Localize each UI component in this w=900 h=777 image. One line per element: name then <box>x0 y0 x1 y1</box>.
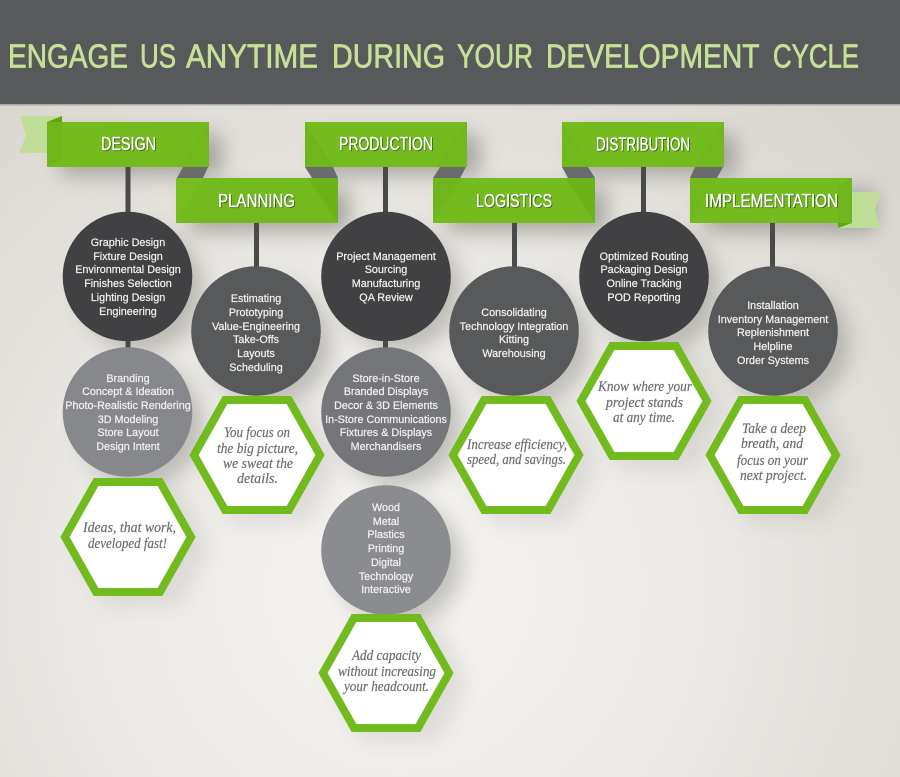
circle: materials: Interactive <box>361 584 411 596</box>
title: CYCLE <box>773 38 859 74</box>
circle: materials: Metal <box>373 516 399 528</box>
circle: planning services: Value-Engineering <box>212 321 300 333</box>
circle: production management <box>321 212 451 341</box>
circle: production management: QA Review <box>359 292 413 304</box>
banner: logistics: LOGISTICS <box>476 191 552 211</box>
banner: design <box>19 116 209 167</box>
circle: logistics services: Kitting <box>499 334 529 346</box>
title: DURING <box>332 38 445 74</box>
circle: branding services: Branding <box>106 373 150 385</box>
banner: design: DESIGN <box>101 134 156 154</box>
circle: materials: Plastics <box>367 529 405 541</box>
banner: production: PRODUCTION <box>339 134 433 154</box>
circle: production management: Project Management <box>336 251 436 263</box>
circle: graphic design services: Finishes Selection <box>84 278 172 290</box>
banner: distribution <box>562 122 724 167</box>
banner shadows <box>62 135 875 232</box>
header bar <box>0 0 900 106</box>
title: ENGAGE <box>8 38 128 74</box>
circle: logistics services: Consolidating <box>481 307 547 319</box>
circle: materials: Technology <box>359 571 414 583</box>
banner: logistics <box>433 178 595 223</box>
circle and hexagon shadows <box>75 228 853 740</box>
circle: store elements: Store-in-Store <box>352 373 420 385</box>
circle: graphic design services: Engineering <box>99 306 157 318</box>
circle: logistics services: Warehousing <box>482 348 546 360</box>
banner: implementation <box>690 178 881 228</box>
circle: graphic design services: Lighting Design <box>91 292 165 304</box>
circle: implementation services: Installation <box>747 300 799 312</box>
circle: store elements: In-Store Communications <box>325 414 448 426</box>
hexagon: implementation callout <box>710 400 836 510</box>
circle: materials: Wood <box>372 502 400 514</box>
circle: store elements: Fixtures & Displays <box>340 427 433 439</box>
circle: store elements: Branded Displays <box>344 386 429 398</box>
circle: implementation services: Inventory Management <box>718 314 828 326</box>
hexagon: design callout <box>65 482 191 592</box>
title: YOUR <box>457 38 533 74</box>
hexagon: distribution callout: project stands <box>605 395 683 411</box>
circle: distribution services: Optimized Routing <box>600 251 688 263</box>
connector stems <box>126 166 775 349</box>
circle: implementation services: Helpline <box>753 341 793 353</box>
hexagon: planning callout <box>194 400 320 510</box>
hexagon: planning callout: the big picture, <box>217 441 298 457</box>
hexagon: production callout: your headcount. <box>342 679 429 695</box>
circle: materials <box>321 485 451 615</box>
hexagon: logistics callout: Increase efficiency, <box>466 437 567 453</box>
circle: planning services: Layouts <box>237 348 276 360</box>
circle: logistics services: Technology Integration <box>460 321 568 333</box>
circle: branding services: Concept & Ideation <box>82 386 174 398</box>
hexagon: planning callout: we sweat the <box>223 456 293 472</box>
circle: materials: Digital <box>371 557 401 569</box>
circle: graphic design services <box>63 212 192 341</box>
hexagon: design callout: Ideas, that work, <box>82 520 176 536</box>
hexagon: implementation callout: next project. <box>740 468 807 484</box>
circle: graphic design services: Graphic Design <box>91 237 165 249</box>
title: ANYTIME <box>186 38 318 74</box>
hexagon: design callout: developed fast! <box>88 536 167 552</box>
circle: store elements: Merchandisers <box>351 441 422 453</box>
circle: branding services <box>63 347 192 477</box>
banner: planning: PLANNING <box>218 191 295 211</box>
circle: implementation services: Order Systems <box>737 355 810 367</box>
circle: materials: Printing <box>368 543 404 555</box>
circle: planning services: Estimating <box>231 293 281 305</box>
hexagon: logistics callout <box>453 400 579 510</box>
banner: distribution: DISTRIBUTION <box>596 134 690 154</box>
light stem between production circles <box>383 475 388 487</box>
circle: graphic design services: Environmental Design <box>75 264 181 276</box>
banner fold connectors <box>177 167 723 178</box>
title: US <box>140 38 176 74</box>
hexagon: logistics callout: speed, and savings. <box>467 452 566 468</box>
hexagon: distribution callout: Know where your <box>597 379 692 395</box>
circle: production management: Sourcing <box>365 264 407 276</box>
circle: implementation services <box>708 266 838 396</box>
hexagon: implementation callout: breath, and <box>741 436 803 452</box>
hexagon: production callout: without increasing <box>338 664 436 680</box>
banner: implementation: IMPLEMENTATION <box>705 191 838 211</box>
circle: distribution services: POD Reporting <box>607 292 681 304</box>
circle: graphic design services: Fixture Design <box>93 251 163 263</box>
circle: distribution services: Packaging Design <box>600 264 688 276</box>
circle: branding services: Photo-Realistic Rendering <box>65 400 191 412</box>
circle: planning services: Take-Offs <box>233 334 280 346</box>
hexagon: implementation callout: focus on your <box>737 453 808 469</box>
hexagon: production callout <box>323 618 449 728</box>
circle: logistics services <box>449 266 579 396</box>
circle: implementation services: Replenishment <box>737 327 809 339</box>
circle: branding services: 3D Modeling <box>98 414 158 426</box>
hexagon: distribution callout <box>581 346 707 456</box>
circle: production management: Manufacturing <box>352 278 420 290</box>
circle: distribution services <box>579 212 709 341</box>
hexagon: production callout: Add capacity <box>351 648 421 664</box>
circle: store elements <box>321 347 451 477</box>
banner: production <box>305 122 467 167</box>
banner: planning <box>176 178 338 223</box>
title: DEVELOPMENT <box>546 38 759 74</box>
circle: distribution services: Online Tracking <box>606 278 682 290</box>
hexagon: implementation callout: Take a deep <box>742 421 806 437</box>
circle: planning services <box>191 266 321 396</box>
hexagon: distribution callout: at any time. <box>613 410 675 426</box>
hexagon: planning callout: You focus on <box>224 425 290 441</box>
circle: branding services: Design Intent <box>96 441 160 453</box>
circle: planning services: Prototyping <box>229 307 283 319</box>
hexagon: planning callout: details. <box>237 471 278 487</box>
circle: branding services: Store Layout <box>97 427 159 439</box>
circle: planning services: Scheduling <box>229 362 283 374</box>
circle: store elements: Decor & 3D Elements <box>334 400 439 412</box>
